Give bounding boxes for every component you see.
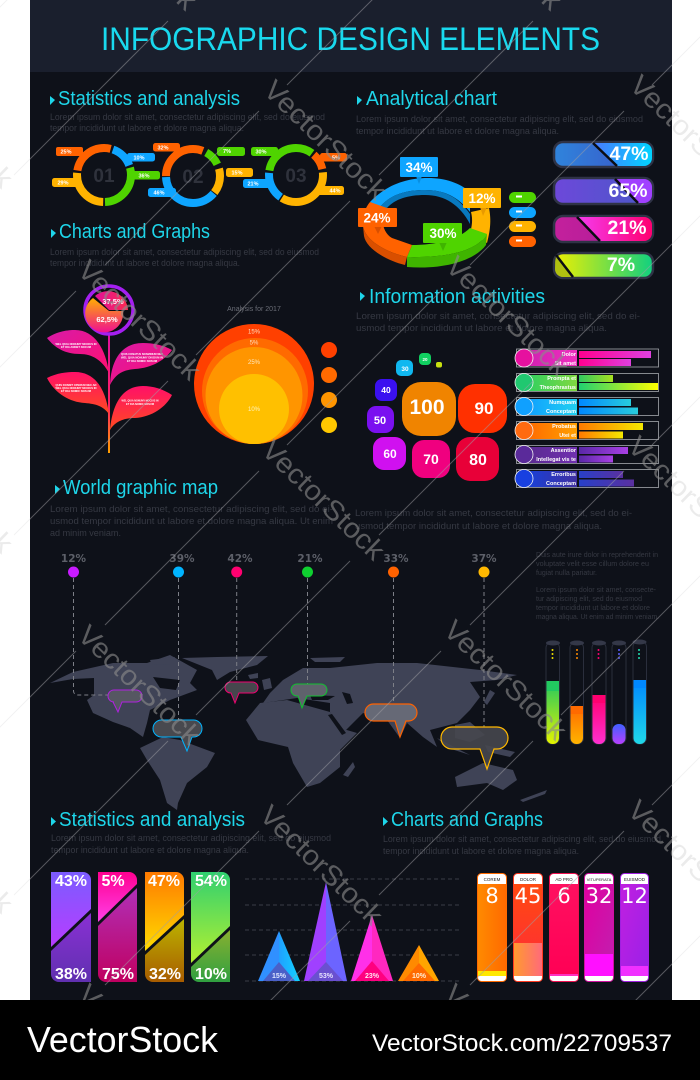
text block: left: Lorem ipsum dolor sit amet, consectetur adipiscing elit, sed do ei- xyxy=(50,504,333,514)
triangle 15%: 15% xyxy=(272,973,287,980)
row: Numquam / Conceptam: Numquam xyxy=(549,400,576,406)
pin 21%: 21% xyxy=(297,553,323,565)
row: Prompta et / Theophrastus xyxy=(515,374,658,392)
split bar: 43% 38%: 43% xyxy=(55,873,87,890)
watermarks: VectorStock xyxy=(438,614,574,747)
split bar: 47% 32% xyxy=(145,872,184,983)
text block: usmod tempor incididunt ut labore et dolore magna aliqua. xyxy=(356,323,607,333)
plant chart: WEL QUIA NONUMY MOCIUS IN xyxy=(122,398,159,402)
ring chart 03: 5% xyxy=(332,156,340,162)
plant chart: WEL QUIA NONUMY MOCIUS IN xyxy=(56,386,97,390)
footer logo: VectorStock xyxy=(27,1019,219,1060)
text block: Lorem ipsum dolor sit amet, consectetur adipiscing elit, sed do eiusmod xyxy=(51,833,331,843)
text block: tempor incididunt ut labore et dolore magna aliqua. xyxy=(383,846,579,856)
callout: 30%: 30% xyxy=(429,226,457,241)
heading: Charts and Graphs xyxy=(59,221,210,243)
concentric circles chart: 15% xyxy=(248,330,261,336)
row: Probatus / Utei et: Probatus xyxy=(552,424,576,430)
card: VITUPERATA 32: VITUPERATA xyxy=(587,877,612,882)
row: Erroribus / Conceptam: Erroribus xyxy=(551,472,576,478)
card: COREM 8: 8 xyxy=(485,884,499,908)
plant chart: 37,5% xyxy=(102,297,124,306)
callout: pink xyxy=(225,682,258,703)
concentric circles chart: 5% xyxy=(250,340,259,346)
pin 12%: 12% xyxy=(61,553,87,565)
text block: side note: Duis aute irure dolor in reprehenderit in xyxy=(536,552,658,559)
text block xyxy=(50,112,325,133)
card: EUISMOD 12: EUISMOD xyxy=(624,877,646,882)
dashed leader lines xyxy=(74,578,484,727)
text block: side note xyxy=(536,552,659,621)
split bar: 43% 38%: 38% xyxy=(55,966,87,983)
bubble blocks chart: 70 xyxy=(423,451,439,467)
card: DOLOR 45: DOLOR xyxy=(520,877,537,882)
card: COREM 8 xyxy=(478,874,506,982)
bubble blocks chart xyxy=(367,353,507,481)
card: COREM 8: COREM xyxy=(484,877,501,882)
plant chart: WEL QUIA NONUMY MOCIUS IN xyxy=(56,342,97,346)
circles legend xyxy=(321,342,337,433)
card: EUISMOD 12: 12 xyxy=(621,884,648,908)
heading: Statistics and analysis xyxy=(59,809,245,831)
row: Assentior / Intellegat vis te: Intellegat vis te xyxy=(536,457,576,463)
pin 42% xyxy=(227,553,253,578)
card: VITUPERATA 32 xyxy=(584,874,614,982)
concentric circles chart xyxy=(194,306,314,444)
ring chart 02: 15% xyxy=(231,170,243,176)
progress bar 7% xyxy=(554,253,653,278)
card: DOLOR 45 xyxy=(514,874,542,982)
text block xyxy=(50,247,319,268)
plant chart: QUIS CONATUS NOSMINUM NEC xyxy=(121,352,163,356)
split bar: 54% 10%: 10% xyxy=(195,966,227,983)
triangle 53% xyxy=(304,882,347,981)
plant chart: QUIS DONNIT OPERUM NEC AD xyxy=(56,383,97,387)
ring chart 01: 01 xyxy=(93,166,115,187)
card: EUISMOD 12 xyxy=(620,874,648,982)
ring chart 02: 46% xyxy=(153,190,165,196)
panel: statistics and analysis bottom xyxy=(51,809,460,983)
callout: yellow xyxy=(441,727,508,769)
plant chart xyxy=(47,286,172,453)
text block: Lorem ipsum dolor sit amet, consectetur adipiscing elit, sed do eiusmod xyxy=(383,834,661,844)
text block: left: ad minim veniam. xyxy=(50,528,121,538)
split bar: 5% 75% xyxy=(98,872,137,983)
watermarks: VectorStock xyxy=(254,799,390,932)
concentric circles chart: Analysis for 2017 xyxy=(227,306,281,313)
pin 37%: 37% xyxy=(471,553,497,565)
triangle 53%: 53% xyxy=(319,973,334,980)
concentric circles chart: 25% xyxy=(248,360,261,366)
ring chart 01: 25% xyxy=(60,150,72,156)
bubble blocks chart: 40 xyxy=(381,385,391,395)
row: Probatus / Utei et: Utei et xyxy=(559,433,576,439)
plant chart: ET DIA NOMIC NOSUM xyxy=(127,359,158,363)
callout: 24%: 24% xyxy=(363,210,391,226)
text block: Lorem ipsum dolor sit amet, consectetur adipiscing elit, sed do eiusmod xyxy=(356,114,643,124)
plant chart: WEL QUIA NONUMY DIUDUM IN xyxy=(121,356,163,360)
pin 12% xyxy=(61,553,87,578)
heading: World graphic map xyxy=(63,477,218,499)
text block: side note: magna aliqua. Ut enim ad minim veniam. xyxy=(536,614,659,621)
row: Assentior / Intellegat vis te xyxy=(515,446,658,464)
split bar: 54% 10% xyxy=(191,872,230,983)
split bar: 47% 32%: 47% xyxy=(148,873,180,890)
row: Dolor / Sit amet: Sit amet xyxy=(555,361,576,367)
callout: 24% xyxy=(358,208,397,234)
tube: orange xyxy=(570,640,584,744)
legend pills xyxy=(509,192,536,247)
tube: pink xyxy=(592,640,606,744)
heading: Information activities xyxy=(369,286,545,308)
ring chart 02 xyxy=(148,143,253,203)
split bar: 47% 32%: 32% xyxy=(149,966,181,983)
text block: tempor incididunt ut labore et dolore magna aliqua. xyxy=(50,258,240,268)
row: Erroribus / Conceptam xyxy=(515,470,658,488)
ring chart 03: 44% xyxy=(329,188,341,194)
progress bar 21% xyxy=(554,216,653,242)
world map xyxy=(50,655,547,810)
ring chart 03: 30% xyxy=(255,150,267,156)
panel: charts and graphs top xyxy=(47,221,337,453)
text block: left xyxy=(50,504,333,538)
text block: left: usmod tempor incididunt ut labore et dolore magna aliqua. Ut enim xyxy=(50,516,333,526)
ring chart 01: 10% xyxy=(133,156,145,162)
plant chart: ET DIA NOMIC NOSUM xyxy=(126,402,155,406)
pin 37% xyxy=(471,553,497,578)
row: Prompta et / Theophrastus: Theophrastus xyxy=(540,385,576,391)
ring chart 02: 32% xyxy=(157,146,169,152)
footer url: VectorStock.com/22709537 xyxy=(372,1030,672,1057)
split bar: 5% 75%: 5% xyxy=(101,873,125,890)
footer bar xyxy=(0,1000,700,1080)
watermarks: VectorStock xyxy=(440,250,576,383)
text block: right xyxy=(355,508,632,531)
row: Assentior / Intellegat vis te: Assentior xyxy=(551,448,577,454)
heading: Statistics and analysis xyxy=(58,88,240,110)
callout: orange xyxy=(365,704,417,737)
3D donut chart xyxy=(358,157,501,268)
row: Prompta et / Theophrastus: Prompta et xyxy=(547,376,576,382)
panel: statistics and analysis top xyxy=(50,88,347,203)
card: VITUPERATA 32: 32 xyxy=(586,884,612,908)
watermarks: VectorStock xyxy=(258,74,394,207)
tube: green xyxy=(546,640,560,744)
bubble blocks chart: 60 xyxy=(383,447,397,461)
pin 21% xyxy=(297,553,323,578)
ring chart 02: 02 xyxy=(182,167,204,188)
text block: tempor incididunt ut labore et dolore magna aliqua. xyxy=(50,123,244,133)
bubble blocks chart: 50 xyxy=(374,415,386,427)
pin 39% xyxy=(169,553,195,578)
card: AD PRO 6: AD PRO xyxy=(555,877,573,882)
text block: side note: tempor incididunt ut labore et dolore xyxy=(536,605,650,612)
triangle 15% xyxy=(258,931,300,981)
row: Dolor / Sit amet xyxy=(515,349,658,367)
watermarks: VectorStock xyxy=(256,434,392,567)
triangle 23%: 23% xyxy=(365,973,380,980)
panel: information activities xyxy=(356,286,658,488)
callout: purple xyxy=(108,690,142,712)
card: AD PRO 6: 6 xyxy=(557,884,571,908)
bubble blocks chart: 20 xyxy=(422,357,428,362)
ring chart 03 xyxy=(243,147,347,202)
ring chart 03: 21% xyxy=(247,182,259,188)
text block: tempor incididunt ut labore et dolore magna aliqua. xyxy=(356,126,559,136)
progress bar 21%: 21% xyxy=(607,217,647,239)
text block: side note: Lorem ipsum dolor sit amet, consecte- xyxy=(536,587,657,594)
text block: right: usmod tempor incididunt ut labore et dolore magna aliqua. xyxy=(355,521,602,531)
split bar: 43% 38% xyxy=(51,872,91,983)
text block: tempor incididunt ut labore et dolore magna aliqua. xyxy=(51,845,249,855)
map seas xyxy=(153,677,353,735)
callout: 34% xyxy=(400,157,438,184)
text block: Lorem ipsum dolor sit amet, consectetur adipiscing elit, sed do eiusmod xyxy=(50,112,325,122)
text block xyxy=(383,834,661,856)
pin 33% xyxy=(383,553,409,578)
ring chart 01 xyxy=(52,147,160,202)
text block: side note: tur adipiscing elit, sed do eiusmod xyxy=(536,596,642,603)
progress bar 65%: 65% xyxy=(608,180,648,202)
heading: Charts and Graphs xyxy=(391,809,543,831)
bubble blocks chart: 90 xyxy=(475,399,493,418)
plant chart: 62,5% xyxy=(96,315,118,324)
ring chart 02: 7% xyxy=(223,149,231,155)
plant chart: ET DIA NOMIC NOSUM xyxy=(61,389,92,393)
tube: blue xyxy=(632,640,646,744)
panel: world graphic map xyxy=(50,477,659,810)
pin 42%: 42% xyxy=(227,553,253,565)
watermarks: VectorStock xyxy=(72,619,208,752)
ring chart 01: 36% xyxy=(138,174,150,180)
text block xyxy=(356,311,640,333)
pin 39%: 39% xyxy=(169,553,195,565)
tube: purple xyxy=(612,640,626,744)
callout: 12% xyxy=(463,188,501,216)
test tube chart xyxy=(546,640,646,744)
triangle 10%: 10% xyxy=(412,973,427,980)
split bar: 54% 10%: 54% xyxy=(195,873,227,890)
progress bar 7%: 7% xyxy=(607,254,635,276)
callout: blue xyxy=(153,720,202,751)
pin 33%: 33% xyxy=(383,553,409,565)
row: Probatus / Utei et xyxy=(515,422,658,440)
text block: Lorem ipsum dolor sit amet, consectetur adipiscing elit, sed do eiusmod xyxy=(50,247,319,257)
row: Dolor / Sit amet: Dolor xyxy=(562,352,577,358)
text block: Lorem ipsum dolor sit amet, consectetur adipiscing elit, sed do ei- xyxy=(356,311,640,321)
ring chart 03: 03 xyxy=(285,166,307,187)
plant chart: ET DIA AMNET NOCUM xyxy=(61,345,92,349)
header band xyxy=(30,0,672,72)
text block xyxy=(356,114,643,136)
card: AD PRO 6 xyxy=(550,874,578,982)
row: Erroribus / Conceptam: Conceptam xyxy=(546,481,576,487)
concentric circles chart: 10% xyxy=(248,407,261,413)
split bar: 5% 75%: 75% xyxy=(102,966,134,983)
progress bar 47%: 47% xyxy=(609,143,649,165)
callout: 34%: 34% xyxy=(405,160,433,175)
callout: green xyxy=(291,684,327,708)
bubble blocks chart: 30 xyxy=(401,366,409,373)
text block: side note: fugiat nulla pariatur. xyxy=(536,570,597,577)
bubble blocks chart: 100 xyxy=(409,396,445,419)
ring chart 01: 29% xyxy=(57,180,69,186)
watermarks: VectorStock xyxy=(72,254,208,387)
text block: right: Lorem ipsum dolor sit amet, consectetur adipiscing elit, sed do ei- xyxy=(355,508,632,518)
text block: side note: voluptate velit esse cillum dolore eu xyxy=(536,561,649,568)
title: INFOGRAPHIC DESIGN ELEMENTS xyxy=(101,21,600,57)
text block xyxy=(51,833,331,855)
panel: charts and graphs bottom xyxy=(383,809,661,982)
row: Numquam / Conceptam: Conceptam xyxy=(546,409,576,415)
triangle 10% xyxy=(398,945,439,981)
triangle 23% xyxy=(351,915,393,981)
card: DOLOR 45: 45 xyxy=(515,884,541,908)
callout: 12%: 12% xyxy=(468,191,496,206)
callout: 30% xyxy=(423,223,462,251)
row: Numquam / Conceptam xyxy=(515,398,658,416)
panel: analytical chart xyxy=(356,88,653,278)
progress bar 65% xyxy=(554,178,653,204)
progress bar 47% xyxy=(554,142,653,167)
bubble blocks chart: 80 xyxy=(469,452,487,469)
heading: Analytical chart xyxy=(366,88,497,110)
